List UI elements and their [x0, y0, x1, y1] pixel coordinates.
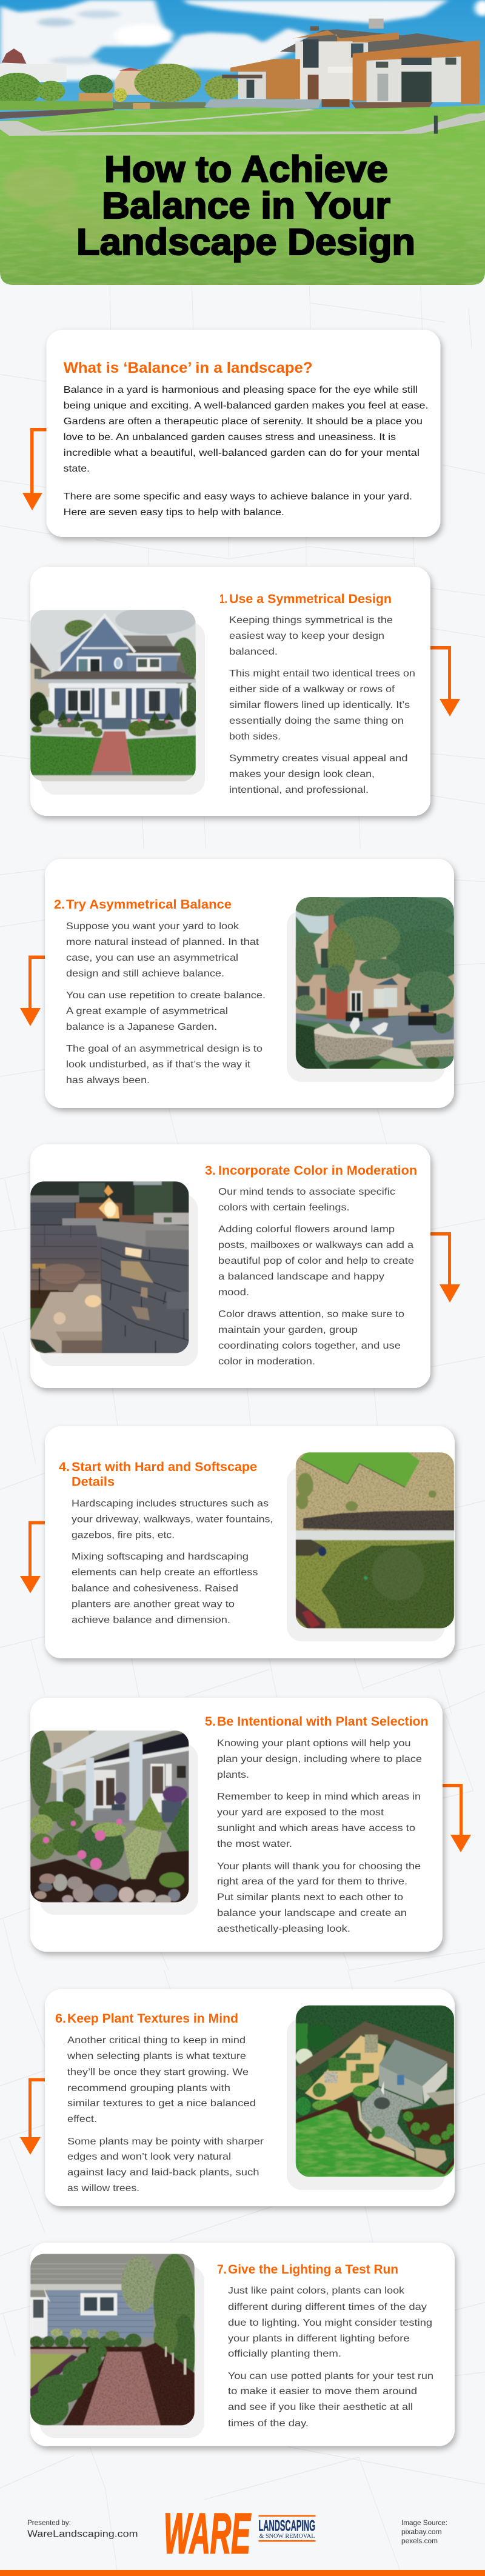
heading: 7.	[217, 2263, 227, 2277]
body text: essentially doing the same thing on	[229, 716, 404, 726]
body text: incredible what a beautiful, well-balanced garden can do for your mental	[64, 448, 420, 458]
heading: 3.	[205, 1164, 216, 1178]
logo: Ware Landscaping and Snow Removal: & SNOW REMOVAL	[259, 2534, 315, 2540]
body text: Balance in a yard is harmonious and pleasing space for the eye while still	[64, 385, 418, 395]
heading: 4.	[59, 1460, 70, 1474]
photo: porch with hydrangeas and rocks	[29, 1729, 189, 1906]
logo: Ware Landscaping and Snow Removal: WARE	[164, 2501, 252, 2565]
body text: achieve balance and dimension.	[72, 1615, 230, 1626]
panel: tip 5	[29, 1698, 443, 1952]
body text: recommend grouping plants with	[67, 2083, 230, 2094]
photo: aerial view of lawn and trench	[296, 1452, 454, 1629]
image backing plate	[287, 2018, 445, 2190]
body text: color in moderation.	[218, 1356, 315, 1367]
body text: Knowing your plant options will help you	[217, 1738, 411, 1749]
body text: officially planting them.	[228, 2349, 341, 2359]
body text: You can use potted plants for your test run	[228, 2371, 433, 2381]
body text: maintain your garden, group	[218, 1325, 358, 1335]
body text: This might entail two identical trees on	[229, 669, 415, 679]
image backing plate	[41, 622, 205, 795]
body text	[228, 2286, 433, 2429]
panel: tip 1	[28, 567, 430, 816]
image backing plate	[287, 1467, 445, 1641]
heading: 1.	[219, 592, 227, 606]
body text: edges and won’t look very natural	[67, 2152, 231, 2162]
arrow: tip 2	[20, 955, 45, 1026]
panel: tip 6	[45, 1989, 455, 2206]
body text: beautiful pop of color and help to create	[218, 1256, 414, 1266]
body text: plan your design, including where to place	[217, 1754, 422, 1764]
heading: Incorporate Color in Moderation	[218, 1164, 417, 1178]
body text: the most water.	[217, 1839, 292, 1849]
lawn	[0, 105, 485, 285]
card	[45, 1426, 455, 1658]
footer: presented by	[27, 2520, 138, 2540]
body text: Keeping things symmetrical is the	[229, 615, 393, 626]
heading: 6.	[55, 2012, 66, 2026]
body text: mood.	[218, 1287, 249, 1298]
body text: your driveway, walkways, water fountains,	[72, 1514, 273, 1525]
body text: times of the day.	[228, 2418, 309, 2429]
footer bar	[0, 2570, 485, 2576]
title: Balance in Your	[102, 185, 390, 226]
body text: The goal of an asymmetrical design is to	[66, 1044, 263, 1054]
panel: what is balance	[46, 330, 440, 537]
hero photo	[0, 0, 485, 285]
body text: either side of a walkway or rows of	[229, 684, 395, 695]
body text: look undisturbed, as if that’s the way it	[66, 1059, 251, 1070]
body text: your plants in different lighting before	[228, 2334, 410, 2344]
body text: Color draws attention, so make sure to	[218, 1309, 404, 1320]
body text	[64, 385, 429, 518]
heading: Keep Plant Textures in Mind	[67, 2012, 238, 2026]
body text: Put similar plants next to each other to	[217, 1892, 403, 1903]
walkway	[0, 109, 485, 136]
body text: when selecting plants is what texture	[67, 2051, 246, 2061]
image backing plate	[39, 1743, 198, 1915]
body text: A great example of asymmetrical	[66, 1006, 228, 1016]
body text	[67, 2035, 264, 2194]
body text: easiest way to keep your design	[229, 631, 384, 641]
body text: Gardens are often a therapeutic place of serenity. It should be a place you	[64, 416, 423, 427]
arrow: tip 3	[430, 1232, 460, 1303]
arrow: tip 6	[20, 2078, 45, 2155]
body text: colors with certain feelings.	[218, 1203, 349, 1213]
panel: tip 2	[45, 859, 467, 1108]
title	[76, 148, 415, 262]
body text: Another critical thing to keep in mind	[67, 2035, 246, 2046]
body text: posts, mailboxes or walkways can add a	[218, 1240, 413, 1250]
body text: similar flowers lined up identically. It’s	[229, 700, 410, 710]
panel: tip 7	[26, 2243, 455, 2446]
heading: 5.	[205, 1715, 216, 1729]
body text: balance is a Japanese Garden.	[66, 1022, 217, 1032]
body text: coordinating colors together, and use	[218, 1341, 401, 1351]
footer: image source: Image Source:	[401, 2520, 447, 2527]
body text: love to be. An unbalanced garden causes stress and uneasiness. It is	[64, 432, 396, 442]
body text: There are some specific and easy ways to achieve balance in your yard.	[64, 492, 412, 502]
body text	[217, 1738, 422, 1934]
body text: aesthetically-pleasing look.	[217, 1924, 350, 1934]
body text: elements can help create an effortless	[72, 1567, 258, 1578]
panel: tip 3	[30, 1144, 430, 1388]
body text: balance and cohesiveness. Raised	[72, 1583, 238, 1594]
body text: Adding colorful flowers around lamp	[218, 1224, 395, 1235]
body text: your yard are exposed to the most	[217, 1807, 384, 1818]
heading: Use a Symmetrical Design	[229, 592, 392, 606]
heading: What is ‘Balance’ in a landscape?	[64, 359, 313, 376]
body text: Mixing softscaping and hardscaping	[72, 1552, 249, 1562]
body text: sunlight and which areas have access to	[217, 1823, 415, 1834]
card	[45, 859, 454, 1108]
image backing plate	[39, 1194, 198, 1366]
body text: Our mind tends to associate specific	[218, 1187, 395, 1197]
title: How to Achieve	[104, 148, 388, 190]
card	[30, 2243, 455, 2446]
title: Landscape Design	[76, 221, 415, 262]
heading: 2.	[54, 898, 65, 912]
arrow: tip 4	[20, 1521, 45, 1593]
body text: balance your landscape and create an	[217, 1908, 407, 1918]
body text: Hardscaping includes structures such as	[72, 1498, 269, 1509]
body text: being unique and exciting. A well-balanced garden makes you feel at ease.	[64, 401, 429, 411]
heading: Details	[72, 1475, 115, 1489]
card	[45, 1989, 455, 2206]
arrow: intro	[22, 428, 46, 510]
arrow: tip 5	[443, 1784, 471, 1852]
body text: to make it easier to move them around	[228, 2386, 417, 2397]
card	[30, 567, 430, 816]
body text: due to lighting. You might consider testing	[228, 2318, 432, 2328]
footer: presented by: Presented by:	[27, 2520, 71, 2527]
body text: Here are seven easy tips to help with balance.	[64, 507, 284, 518]
heading	[59, 1460, 257, 1489]
body text: balanced.	[229, 647, 278, 657]
footer: image source: pexels.com	[401, 2538, 438, 2545]
body text: Some plants may be pointy with sharper	[67, 2137, 264, 2147]
body text: plants.	[217, 1770, 249, 1780]
logo: Ware Landscaping and Snow Removal: LANDSCAPING	[258, 2518, 315, 2535]
body text: Your plants will thank you for choosing the	[217, 1861, 421, 1872]
body text: Suppose you want your yard to look	[66, 921, 239, 932]
body text	[229, 615, 415, 795]
body text: similar textures to get a nice balanced	[67, 2098, 256, 2109]
image backing plate	[39, 2266, 204, 2438]
arrow: tip 1	[430, 646, 460, 716]
body text: planters are another great way to	[72, 1599, 235, 1610]
body text: different during different times of the day	[228, 2302, 427, 2312]
photo: house with stone patio under tree	[293, 895, 467, 1069]
modern house	[204, 19, 480, 112]
body text: both sides.	[229, 732, 281, 742]
photo: stone wall with lights and fire	[30, 1181, 189, 1353]
image backing plate	[287, 910, 445, 1082]
body text: Remember to keep in mind which areas in	[217, 1792, 421, 1802]
body text	[72, 1498, 273, 1626]
body text: Just like paint colors, plants can look	[228, 2286, 405, 2296]
card	[30, 1698, 443, 1952]
photo: aerial garden with shed	[295, 2005, 455, 2177]
body text: they’ll be once they start growing. We	[67, 2067, 249, 2078]
body text: intentional, and professional.	[229, 785, 369, 795]
body text: design and still achieve balance.	[66, 969, 224, 979]
footer: image source	[401, 2520, 447, 2545]
photo: brick walkway with hedges	[26, 2254, 196, 2426]
body text: as willow trees.	[67, 2183, 139, 2194]
body text: case, you can use an asymmetrical	[66, 953, 238, 963]
body text: You can use repetition to create balance.	[66, 990, 266, 1001]
body text: state.	[64, 464, 90, 474]
heading: Be Intentional with Plant Selection	[217, 1715, 429, 1729]
heading: Start with Hard and Softscape	[72, 1460, 257, 1474]
photo: blue craftsman house	[28, 606, 198, 781]
body text: right area of the yard for them to thrive.	[217, 1877, 407, 1887]
body text: effect.	[67, 2114, 97, 2124]
hero: photo of modern house and lawn with title	[0, 0, 485, 285]
heading: Give the Lighting a Test Run	[228, 2263, 398, 2277]
body text	[66, 921, 266, 1086]
footer: presented by: WareLandscaping.com	[27, 2529, 138, 2540]
body text: and see if you like their aesthetic at all	[228, 2402, 413, 2412]
body text: against lacy and laid-back plants, such	[67, 2167, 259, 2178]
background trees and buildings	[0, 48, 241, 119]
body text: makes your design look clean,	[229, 769, 375, 779]
footer: image source: pixabay.com	[401, 2529, 442, 2536]
body text: a balanced landscape and happy	[218, 1272, 384, 1282]
body text: Symmetry creates visual appeal and	[229, 753, 407, 764]
panel: tip 4	[45, 1426, 455, 1658]
body text: gazebos, fire pits, etc.	[72, 1530, 175, 1541]
body text: has always been.	[66, 1075, 150, 1086]
body text: more natural instead of planned. In that	[66, 937, 259, 947]
card	[30, 1144, 430, 1388]
card	[46, 330, 440, 537]
body text	[218, 1187, 414, 1367]
heading: Try Asymmetrical Balance	[66, 898, 232, 912]
